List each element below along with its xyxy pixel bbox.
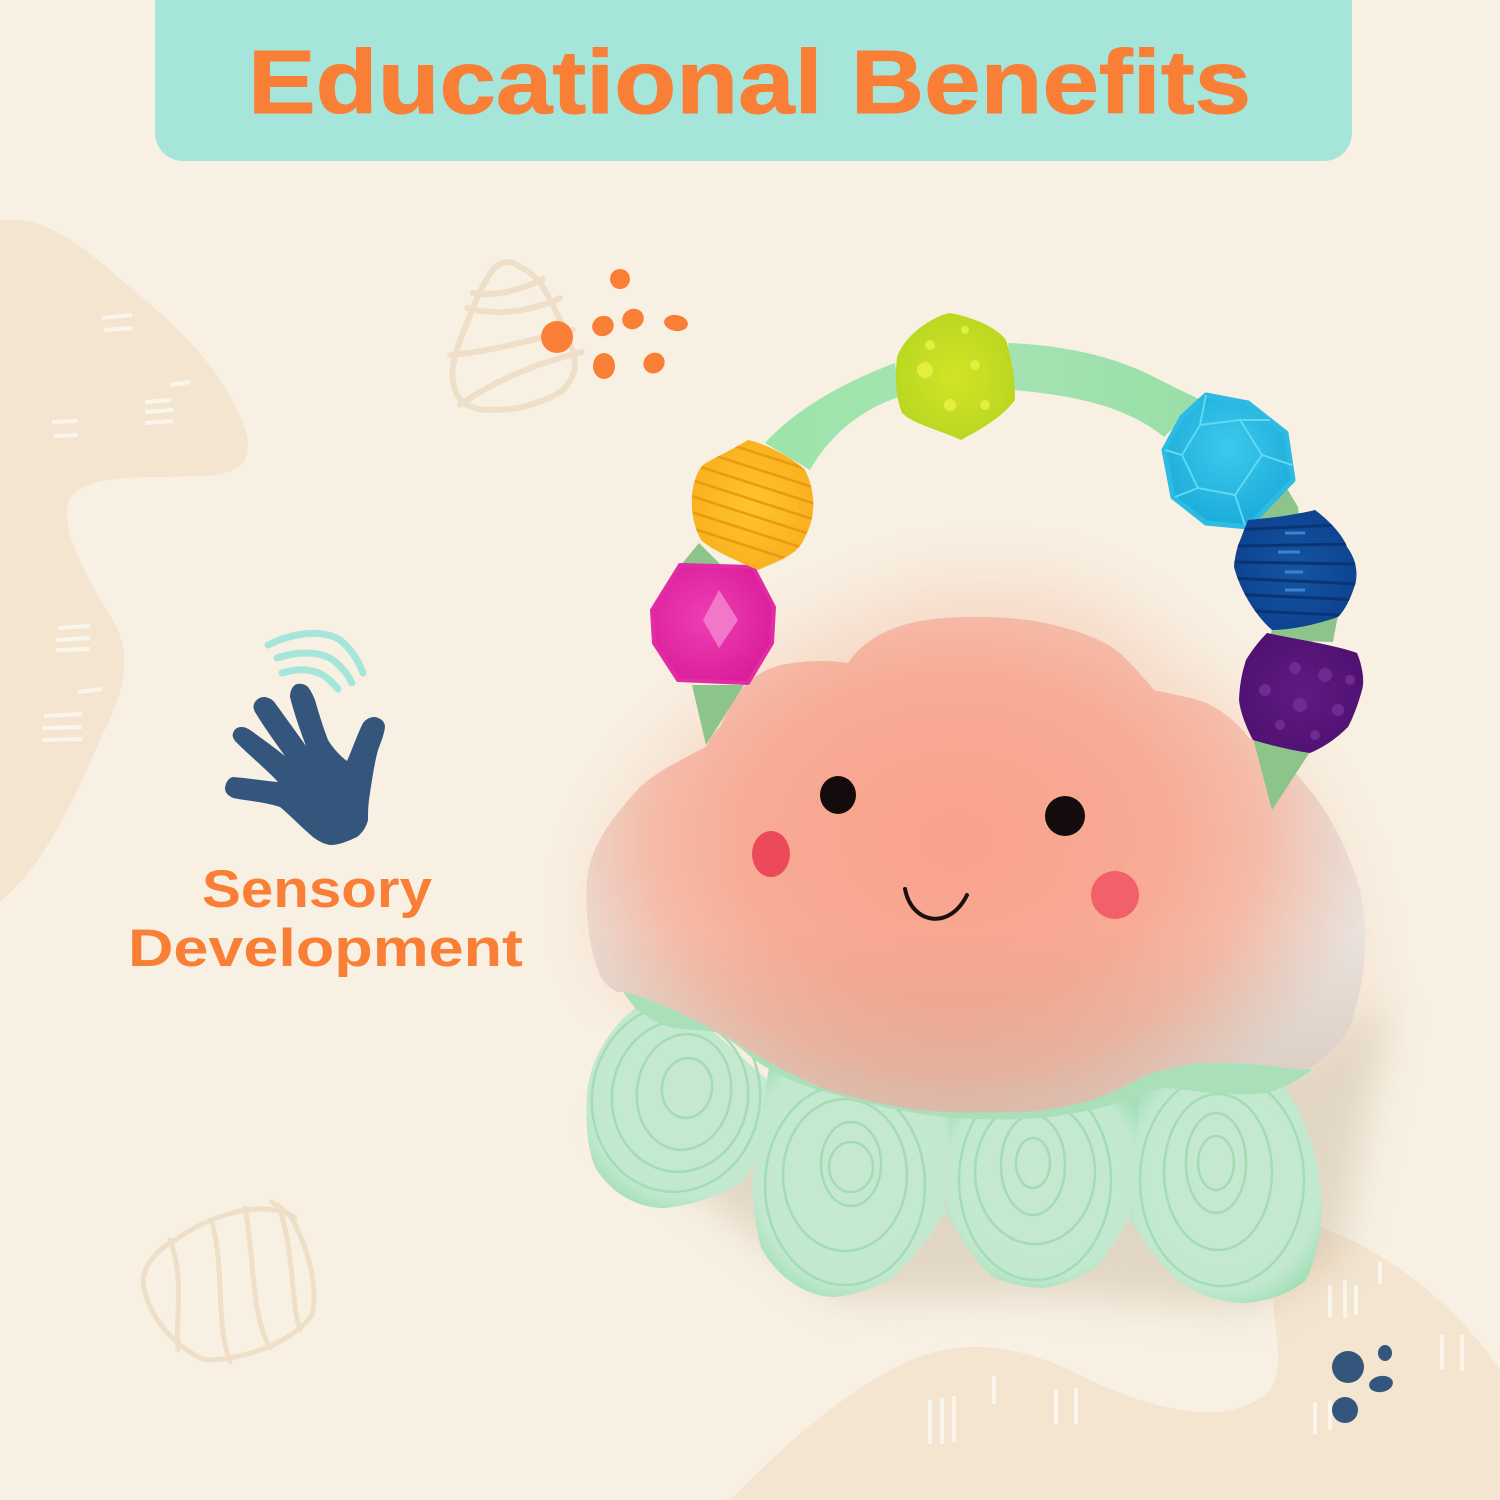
cloud rim (620, 988, 1312, 1119)
title: Educational Benefits (248, 33, 1251, 133)
bead: yellow (692, 440, 814, 570)
petal 3 (946, 1080, 1140, 1288)
beads (652, 313, 1363, 753)
label: sensory development (128, 860, 523, 978)
bead: lime (896, 313, 1015, 440)
petal 4 (1130, 1074, 1321, 1303)
title banner (155, 0, 1352, 161)
bead: blue (1230, 510, 1360, 630)
bead: pink (652, 565, 774, 683)
bead: purple (1239, 633, 1363, 753)
toy glow and shadow (599, 581, 1390, 1310)
handle arch (680, 343, 1338, 810)
face (752, 776, 1139, 919)
doodle: striped shell bottom left (143, 1202, 314, 1362)
handle legs (680, 487, 1338, 810)
cloud body (586, 617, 1365, 1113)
teether petals (580, 993, 1321, 1303)
background blob: left (0, 219, 248, 902)
background blob: bottom right (730, 1220, 1500, 1500)
icon: sensory hand with waves (225, 633, 385, 845)
petal 1 (580, 993, 790, 1208)
doodle: dots bottom right (1332, 1345, 1394, 1423)
doodle: striped shell with orange dots (450, 262, 689, 410)
bead: cyan (1164, 395, 1293, 527)
toy: rainbow cloud teether (580, 313, 1390, 1310)
label: sensory development: Development (128, 919, 523, 978)
petal 2 (752, 1060, 950, 1297)
label: sensory development: Sensory (202, 860, 433, 919)
handle band (765, 343, 1201, 470)
